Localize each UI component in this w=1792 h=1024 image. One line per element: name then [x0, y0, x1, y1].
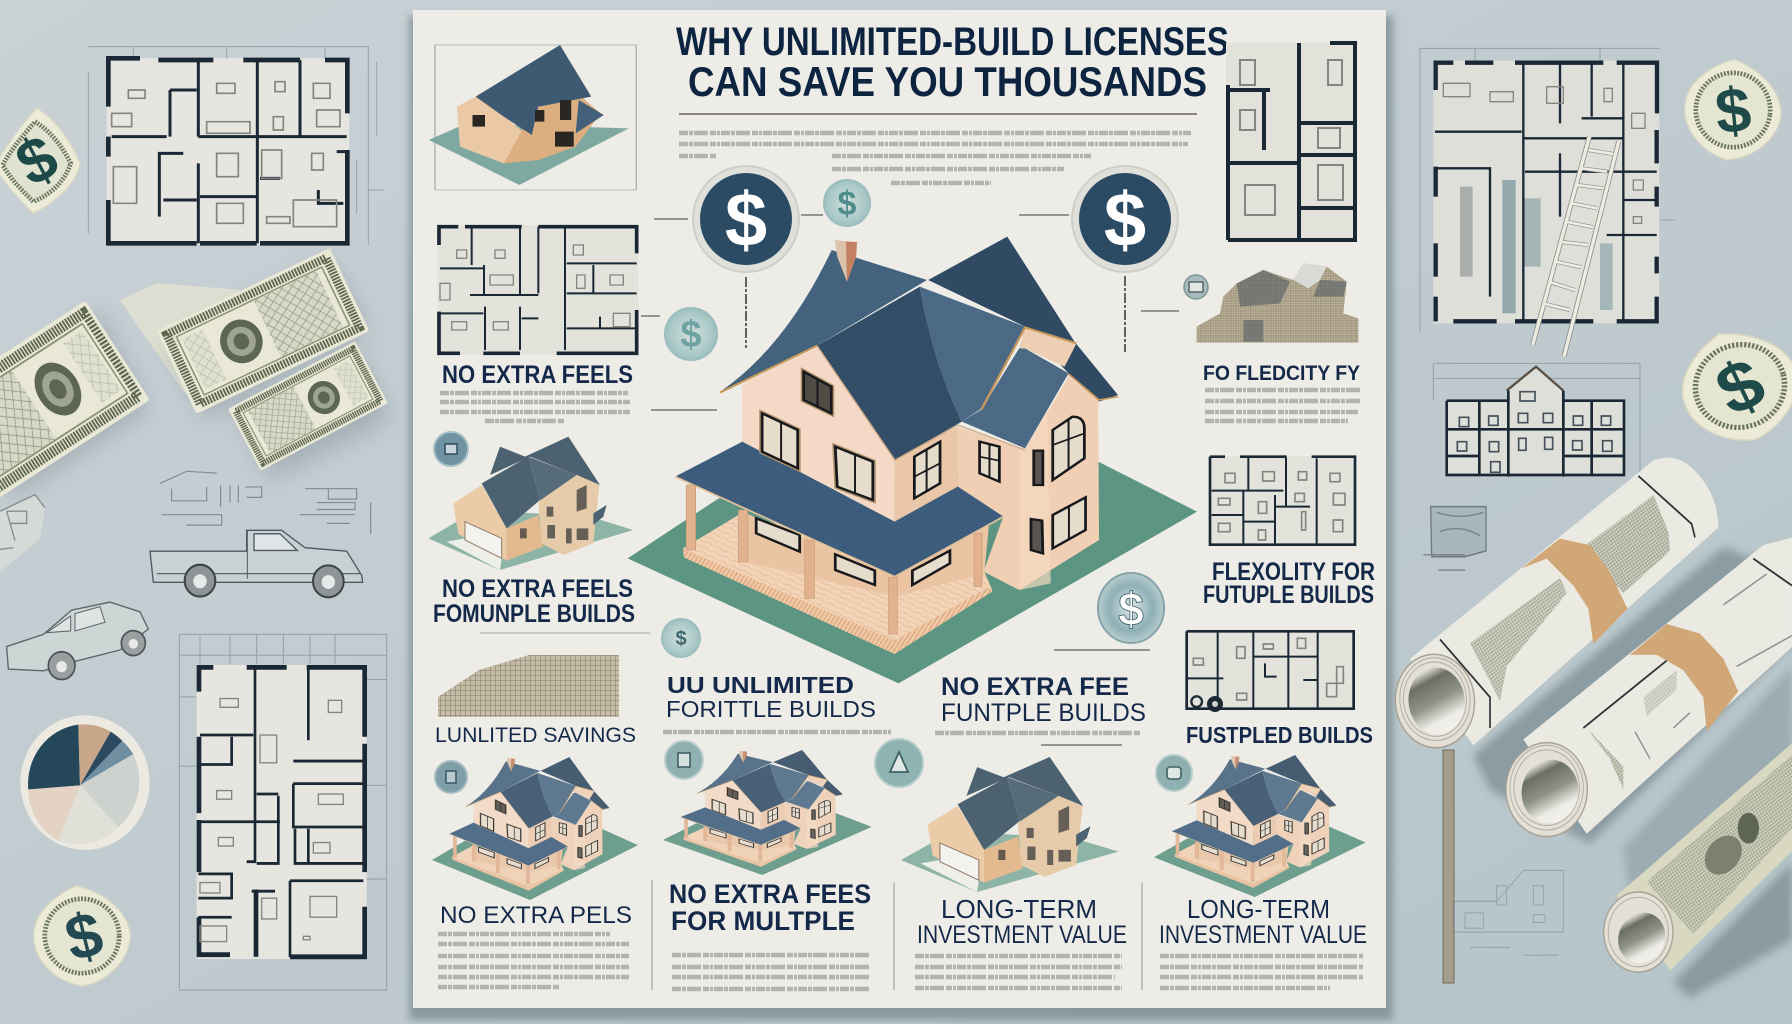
label: uu unlimited: UU UNLIMITED [667, 672, 854, 698]
right decor: dollar note top [1678, 54, 1788, 166]
column 4: long-term investment value: INVESTMENT VALUE [1159, 921, 1367, 949]
column 3: long-term investment value: INVESTMENT VALUE [917, 921, 1127, 949]
description [1205, 390, 1360, 421]
left decor: car [7, 602, 148, 680]
floor plan right lower [1186, 630, 1355, 712]
section: no extra feels top [437, 225, 638, 421]
mini house B [663, 750, 872, 875]
ladder [1533, 137, 1619, 357]
small icons row [435, 739, 1192, 793]
title: WHY UNLIMITED-BUILD LICENSES [676, 20, 1229, 64]
small teal icon lower left [661, 618, 701, 658]
right decor: dollar note right [1669, 317, 1792, 455]
label: flexibility for future builds: FUTUPLE BUILDS [1203, 581, 1374, 609]
column 2: no extra fees for multiple: NO EXTRA FEES [669, 879, 871, 909]
right decor: faint elevation sketch [1453, 870, 1563, 955]
right decor: small sketch [1423, 507, 1486, 570]
small teal coin left [664, 307, 718, 361]
small teal coin top: $ [838, 185, 857, 223]
small grey coin [1184, 275, 1208, 299]
money roll 3 [1592, 743, 1792, 985]
dollar coin left: $ [725, 178, 767, 263]
label: no extra feels for multiple builds: FOMUNPLE BUILDS [433, 600, 635, 628]
column 4: long-term investment value: LONG-TERM [1187, 894, 1330, 924]
intro text block [679, 114, 1197, 183]
left decor: pie chart [20, 715, 150, 850]
left decor: lower floor plan [179, 634, 387, 990]
small coin icon [434, 432, 468, 466]
blueprint roll 1 [1382, 458, 1718, 763]
left decor: blueprint sketches [160, 471, 371, 534]
small teal icon lower left: $ [675, 628, 687, 650]
label: furtpled builds: FUSTPLED BUILDS [1186, 722, 1373, 748]
main house [628, 237, 1197, 683]
column 4: long-term investment value [1159, 894, 1367, 988]
label: no extra feels for multiple builds: NO EXTRA FEELS [442, 575, 633, 603]
label: NO EXTRA FEELS [442, 361, 633, 389]
description [440, 393, 630, 421]
house with garage [428, 437, 633, 570]
left decor: pickup truck [150, 530, 363, 597]
right decor: dollar note top: $ [1712, 75, 1754, 148]
building illustration [1197, 263, 1358, 343]
title: CAN SAVE YOU THOUSANDS [688, 58, 1207, 105]
right decor: vertical ruler [1443, 750, 1454, 983]
teal dollar coin lower right [1098, 573, 1164, 643]
label: LUNLITED SAVINGS [435, 724, 636, 747]
left decor: dollar note bottom [34, 886, 130, 986]
right decor: roll shadows [1473, 547, 1792, 998]
right decor: floor plan with ladder [1420, 48, 1675, 357]
left decor: dollar note: $ [5, 122, 69, 200]
teal dollar coin lower right: $ [1118, 583, 1144, 635]
column 3: long-term investment value [915, 894, 1127, 988]
dollar coin left [693, 166, 799, 272]
label: uu unlimited: FORITTLE BUILDS [666, 696, 876, 722]
floor plan right middle [1209, 456, 1356, 546]
right decor: elevation drawing [1433, 363, 1640, 477]
column 2: no extra fees for multiple [669, 879, 871, 989]
section: lunlited savings [435, 655, 636, 747]
title [676, 20, 1229, 105]
column 1: no extra pels [438, 902, 632, 987]
label: uu unlimited [663, 672, 891, 732]
small teal coin top [823, 179, 871, 227]
left decor: dollar note [0, 108, 80, 213]
house illustration top left [429, 45, 636, 190]
mini house D [1154, 755, 1366, 897]
connector lines [641, 215, 1179, 650]
column 2: no extra fees for multiple: FOR MULTPLE [671, 906, 855, 936]
column dividers [652, 880, 1142, 990]
floor plan top right [1226, 43, 1357, 242]
floor plan [437, 225, 638, 355]
dollar coin right [1072, 166, 1178, 272]
column 3: long-term investment value: LONG-TERM [941, 894, 1097, 924]
mini house C with garage [901, 757, 1119, 892]
mini house A [432, 757, 638, 900]
main panel [413, 10, 1386, 1008]
right decor: dollar note right: $ [1704, 343, 1777, 431]
left decor: shadows of bills [0, 265, 390, 500]
label: FO FLEDCITY FY [1203, 362, 1360, 385]
label: no extra fee: FUNTPLE BUILDS [941, 699, 1146, 727]
label: no extra fee: NO EXTRA FEE [941, 673, 1129, 701]
dollar coin right: $ [1104, 178, 1146, 263]
left decor: dollar note bottom: $ [59, 899, 110, 975]
building sketch [438, 655, 619, 717]
left decor: banknote 1 [0, 301, 150, 503]
left decor: floor plan [88, 47, 383, 245]
small teal coin left: $ [680, 314, 702, 356]
label: no extra fee [935, 673, 1146, 745]
section: flexibility right [1197, 263, 1360, 421]
column 1: no extra pels: NO EXTRA PELS [440, 902, 632, 929]
panel shadow [409, 16, 1393, 1020]
left decor: banknote 2 [157, 248, 369, 414]
blueprint roll 2 [1493, 537, 1792, 852]
left decor: back bill [120, 283, 240, 413]
left decor: curled note at edge [0, 495, 45, 572]
label: flexibility for future builds: FLEXOLITY FOR [1212, 558, 1375, 586]
label: flexibility for future builds [1203, 558, 1375, 609]
label: no extra feels for multiple builds [433, 575, 650, 633]
left decor: banknote 3 [228, 341, 388, 471]
